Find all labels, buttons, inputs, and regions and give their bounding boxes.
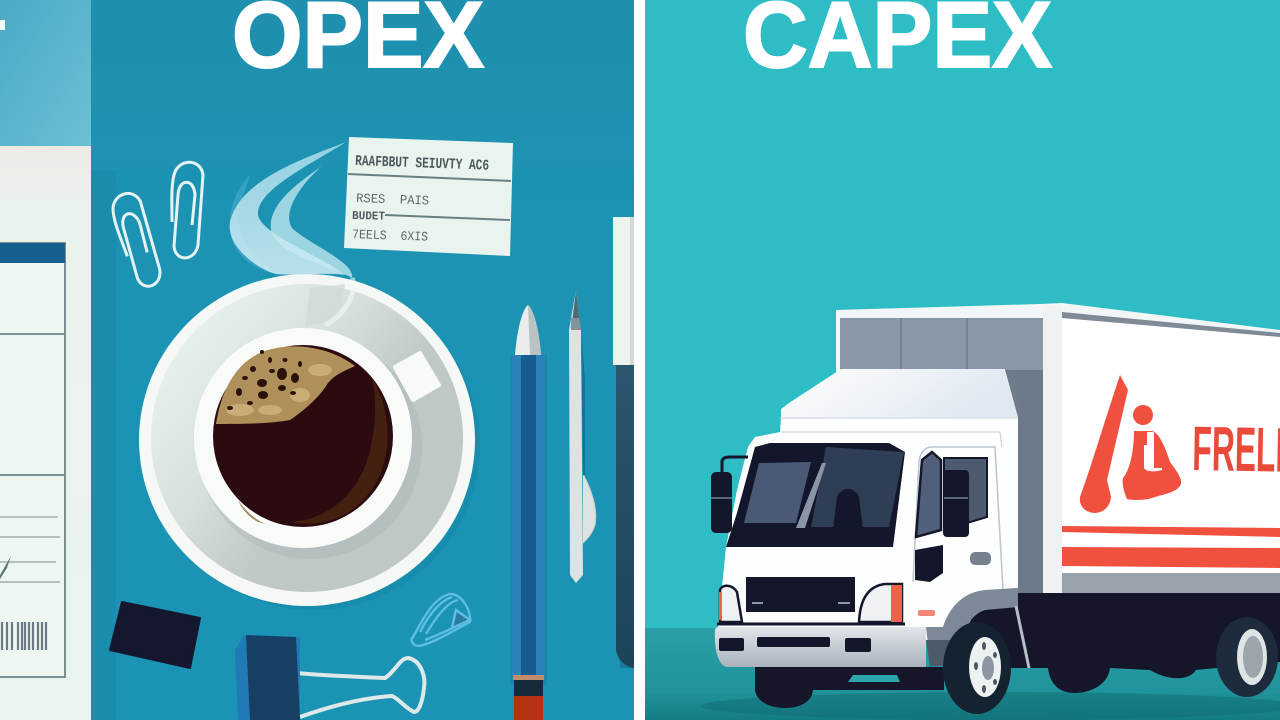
form table [0,243,65,677]
windshield [726,443,905,547]
wheel well [950,605,1030,668]
note row three: 7EELS 6XIS [352,227,429,245]
cup rim [194,328,412,548]
ground shadow [700,692,1280,720]
rear wheel [1216,617,1278,697]
note row two: BUDET [352,209,385,224]
crema foam [216,346,355,424]
grille [746,577,855,612]
bumper [715,627,926,667]
cup shadow [198,335,422,559]
logo mark [1080,375,1181,513]
budget note [344,137,513,256]
note row one: RSES PAIS [356,191,430,209]
front wheel [943,622,1011,714]
left mirror [711,457,748,533]
small door marker [918,610,935,616]
box stripes [1062,526,1280,568]
icon: paper clip right [172,162,203,258]
divider [634,0,645,720]
note title: RAAFBBUT SEIUVTY AC6 [355,153,489,175]
box corner pillar [1043,305,1062,593]
panel shadow strip [91,170,116,720]
box side [1062,316,1280,593]
strip paper [0,146,91,720]
coffee cup [194,328,439,559]
blue pen [510,305,547,720]
under-cab [755,667,944,708]
saucer [139,274,480,610]
icon: blue paper clip [412,594,470,646]
truck [700,303,1280,720]
ground [645,628,1280,720]
cargo box [836,303,1280,600]
door handle [970,552,991,565]
box rim [836,303,1280,600]
strip header [0,0,91,146]
panel background [645,0,1280,720]
coffee [213,345,393,527]
box lower band [1062,573,1280,593]
notebook edge item [613,217,634,668]
steam [230,142,353,325]
panel: CAPEX [645,0,1280,720]
headlights [717,584,905,624]
cab body [718,417,1018,640]
cup handle [395,353,439,400]
barcode [2,622,46,650]
small white mark [0,20,5,30]
box front grey panel [840,318,1044,593]
door outline [913,447,1003,590]
slit [848,675,900,682]
cab roof [781,369,1018,417]
icon: paper clip left [107,190,169,290]
panel: left paper strip [0,0,91,720]
panel background [91,0,634,720]
panel: OPEX [91,0,634,720]
chassis [1010,593,1280,693]
silver pencil [569,290,596,583]
wheel arch [926,588,1018,662]
binder clip [235,635,424,720]
side window [915,452,987,582]
eraser [110,602,200,668]
